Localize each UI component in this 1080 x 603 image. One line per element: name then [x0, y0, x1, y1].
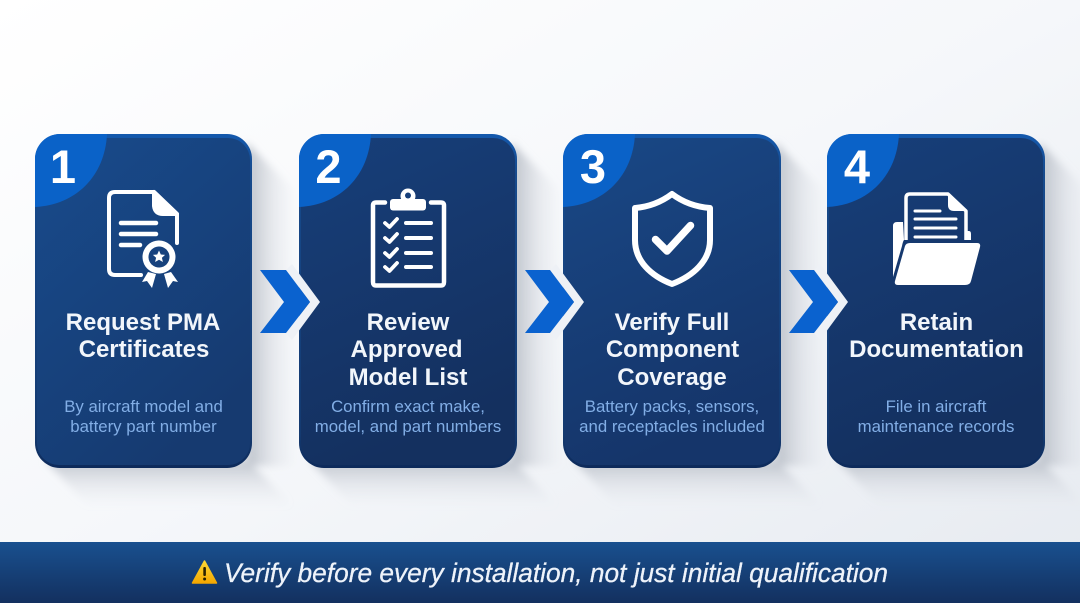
description: step 1: battery part number [70, 417, 217, 436]
description: step 3: Battery packs, sensors, [585, 397, 759, 416]
title: step 1: Certificates [79, 336, 209, 363]
title: step 4: Retain [900, 309, 973, 336]
panel: step 1 [35, 134, 296, 506]
title: step 3: Verify Full [615, 309, 729, 336]
title: step 2: Model List [349, 364, 467, 391]
footer banner [0, 542, 1080, 603]
step badge 3: 3 [580, 140, 606, 193]
description: step 2: Confirm exact make, [331, 397, 485, 416]
icon: warning triangle [192, 561, 216, 583]
step badge 2 [299, 134, 371, 207]
panel: step 4 [827, 134, 1080, 506]
arrow: step 3 to 4 [789, 264, 848, 340]
title: step 3: Coverage [617, 364, 727, 391]
title: step 2: Approved [350, 336, 463, 363]
description: step 3: and receptacles included [579, 417, 765, 436]
icon: certificate document [109, 192, 178, 288]
step badge 4 [827, 134, 899, 207]
arrow: step 1 to 2 [260, 264, 320, 340]
step badge 2: 2 [315, 140, 342, 193]
step badge 1: 1 [50, 140, 76, 193]
icon: shield with check [635, 194, 710, 284]
title: step 2: Review [367, 309, 450, 336]
description: step 2: model, and part numbers [315, 417, 501, 436]
description: step 4: File in aircraft [886, 397, 987, 416]
icon: folder with document [893, 193, 980, 285]
title: step 3: Component [606, 336, 739, 363]
step badge 3 [563, 134, 635, 207]
step badge 1 [35, 134, 107, 207]
description: step 1: By aircraft model and [64, 397, 223, 416]
title: step 1: Request PMA [66, 309, 220, 336]
title: step 4: Documentation [849, 336, 1024, 363]
step badge 4: 4 [844, 140, 870, 193]
description: step 4: maintenance records [858, 417, 1014, 436]
icon: clipboard checklist [373, 188, 444, 286]
footer message: Verify before every installation, not just initial qualification [224, 558, 888, 588]
panel: step 2 [299, 134, 561, 506]
panel: step 3 [563, 134, 825, 506]
arrow: step 2 to 3 [525, 264, 584, 340]
